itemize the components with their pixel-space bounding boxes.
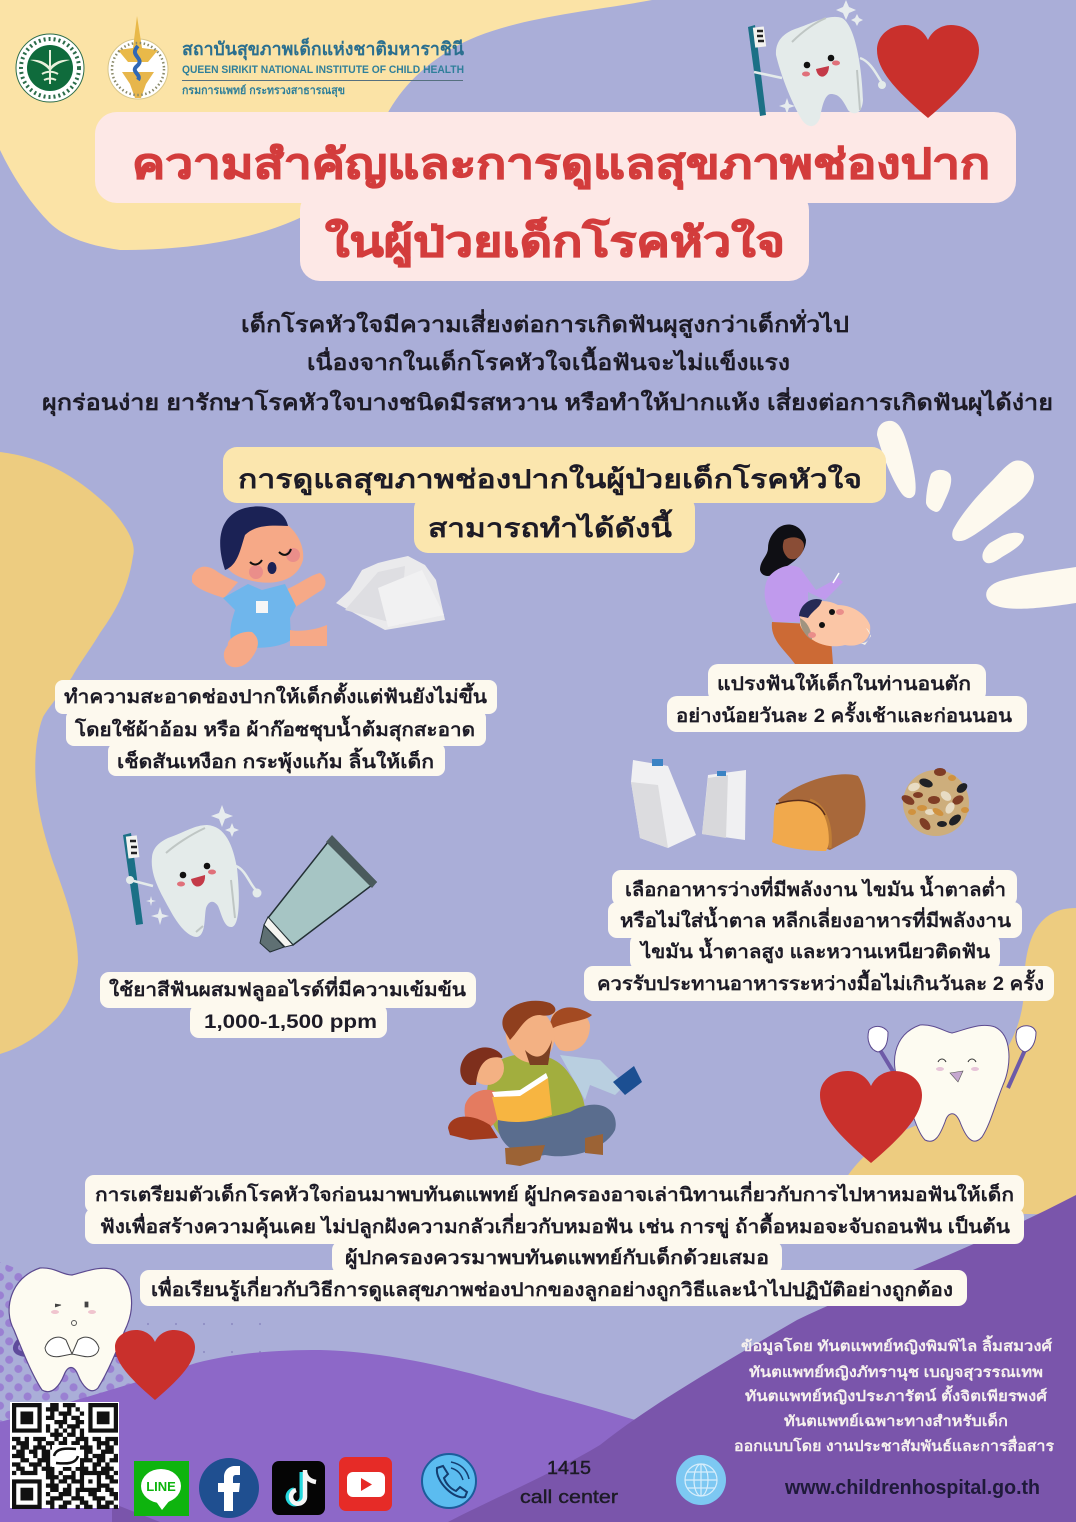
card: preparation text: ฟังเพื่อสร้างความคุ้นเคย ไม่ปลูกฝังความกลัวเกี่ยวกับหมอฟัน เช่น การขู่ ถ้าดื้อหมอจะจับถอนฟัน เป็นต้น xyxy=(100,1212,1010,1239)
subheading plate xyxy=(223,447,886,553)
credits: ทันตแพทย์หญิงภัทรานุช เบญจสุวรรณเทพ xyxy=(749,1363,1043,1381)
illustration: gauze pads xyxy=(336,556,445,630)
wave: light purple xyxy=(0,1350,700,1522)
illustration: toothpaste tube xyxy=(260,835,377,952)
icon: TikTok xyxy=(272,1461,325,1515)
logo: Ministry of Public Health xyxy=(16,34,84,102)
call center label xyxy=(520,1458,618,1507)
icon: phone xyxy=(422,1454,476,1508)
illustration: mother brushing baby's teeth xyxy=(760,525,871,664)
title plate xyxy=(95,112,1016,281)
card: snacks text: ไขมัน น้ำตาลสูง และหวานเหนียวติดฟัน xyxy=(639,937,990,964)
title: ในผู้ป่วยเด็กโรคหัวใจ xyxy=(325,217,785,268)
card: brushing text: แปรงฟันให้เด็กในท่านอนตัก xyxy=(717,671,971,695)
institute name: สถาบันสุขภาพเด็กแห่งชาติมหาราชินี xyxy=(182,37,465,61)
illustration: happy tooth xyxy=(868,1025,1036,1141)
card: clean mouth text: โดยใช้ผ้าอ้อม หรือ ผ้าก๊อซชุบน้ำต้มสุกสะอาด xyxy=(74,715,475,742)
illustration: sleeping baby xyxy=(192,506,327,667)
icon: red heart bottom xyxy=(115,1330,195,1400)
blob: right tan xyxy=(830,908,1076,1215)
shape: small dark purple lower left xyxy=(112,1503,160,1522)
intro paragraph: เด็กโรคหัวใจมีความเสี่ยงต่อการเกิดฟันผุสูงกว่าเด็กทั่วไป xyxy=(241,308,849,339)
card: snacks text: เลือกอาหารว่างที่มีพลังงาน ไขมัน น้ำตาลต่ำ xyxy=(625,875,1006,901)
credits xyxy=(734,1335,1054,1455)
icon: red heart top xyxy=(877,25,979,118)
illustration: milk cartons xyxy=(631,759,746,848)
card: preparation text: เพื่อเรียนรู้เกี่ยวกับวิธีการดูแลสุขภาพช่องปากของลูกอย่างถูกวิธีและนำไปปฏิบัติอย่างถูกต้อง xyxy=(151,1276,953,1302)
icon: red heart middle xyxy=(820,1071,922,1163)
icon: YouTube xyxy=(339,1457,392,1511)
shape: dark purple corner xyxy=(448,1195,1076,1522)
card: clean mouth text: ทำความสะอาดช่องปากให้เด็กตั้งแต่ฟันยังไม่ขึ้น xyxy=(64,682,487,708)
icon: tooth with toothbrush, top xyxy=(748,0,886,126)
illustration: tooth with toothbrush xyxy=(123,805,262,937)
institute name xyxy=(182,37,465,98)
logo: Queen Sirikit institute xyxy=(108,16,168,99)
card: brushing text xyxy=(667,664,1027,732)
blob: left tan xyxy=(0,452,134,1054)
illustration: parent reading with children xyxy=(448,1001,642,1166)
institute name: QUEEN SIRIKIT NATIONAL INSTITUTE OF CHILD HEALTH xyxy=(182,64,464,76)
title xyxy=(132,141,990,268)
card: preparation text: ผู้ปกครองควรมาพบทันตแพทย์กับเด็กด้วยเสมอ xyxy=(345,1245,769,1270)
card: brushing text: อย่างน้อยวันละ 2 ครั้งเช้าและก่อนนอน xyxy=(676,701,1012,727)
card: toothpaste text: 1,000-1,500 ppm xyxy=(204,1012,377,1033)
illustration: bread loaf xyxy=(772,774,866,851)
card: snacks text: ควรรับประทานอาหารระหว่างมื้อไม่เกินวันละ 2 ครั้ง xyxy=(597,969,1044,995)
halftone dots xyxy=(0,1262,150,1440)
icon: LINE: LINE xyxy=(146,1479,176,1494)
institute name: กรมการแพทย์ กระทรวงสาธารณสุข xyxy=(182,84,345,98)
title: ความสำคัญและการดูแลสุขภาพช่องปาก xyxy=(132,141,990,190)
intro paragraph xyxy=(42,308,1053,417)
burst: cream rays xyxy=(877,421,1076,609)
card: preparation text xyxy=(85,1175,1024,1306)
subheading xyxy=(238,463,862,543)
call center label: call center xyxy=(520,1487,618,1507)
intro paragraph: ผุกร่อนง่าย ยารักษาโรคหัวใจบางชนิดมีรสหวาน หรือทำให้ปากแห้ง เสี่ยงต่อการเกิดฟันผุได้ง่าย xyxy=(42,386,1053,417)
icon: globe xyxy=(676,1455,726,1505)
card: toothpaste text: ใช้ยาสีฟันผสมฟลูออไรด์ที่มีความเข้มข้น xyxy=(109,976,466,1002)
QR code xyxy=(10,1402,119,1508)
card: snacks text: หรือไม่ใส่น้ำตาล หลีกเลี่ยงอาหารที่มีพลังงาน xyxy=(620,906,1011,932)
credits: ข้อมูลโดย ทันตแพทย์หญิงพิมพิไล ลิ้มสมวงศ์ xyxy=(741,1335,1053,1355)
intro paragraph: เนื่องจากในเด็กโรคหัวใจเนื้อฟันจะไม่แข็งแรง xyxy=(307,346,790,375)
subheading: การดูแลสุขภาพช่องปากในผู้ป่วยเด็กโรคหัวใจ xyxy=(238,463,862,496)
website: www.childrenhospital.go.th xyxy=(784,1477,1040,1499)
card: toothpaste text xyxy=(100,972,476,1038)
subheading: สามารถทำได้ดังนี้ xyxy=(428,508,673,543)
blob: top-left yellow xyxy=(0,0,652,250)
card: preparation text: การเตรียมตัวเด็กโรคหัวใจก่อนมาพบทันตแพทย์ ผู้ปกครองอาจเล่านิทานเกี่ยวกับการไปหาหมอฟันให้เด็ก xyxy=(95,1181,1014,1207)
call center label: 1415 xyxy=(547,1458,591,1478)
illustration: tooth making heart hands xyxy=(9,1268,132,1392)
fine dot texture xyxy=(135,1308,285,1364)
illustration: mixed beans xyxy=(900,768,969,836)
card: clean mouth text: เช็ดสันเหงือก กระพุ้งแก้ม ลิ้นให้เด็ก xyxy=(117,747,434,774)
credits: ทันตแพทย์หญิงประภารัตน์ ตั้งจิตเพียรพงศ์ xyxy=(745,1385,1048,1405)
icon: Facebook xyxy=(199,1458,259,1518)
icon: LINE xyxy=(134,1461,189,1516)
credits: ทันตแพทย์เฉพาะทางสำหรับเด็ก xyxy=(784,1411,1008,1430)
credits: ออกแบบโดย งานประชาสัมพันธ์และการสื่อสาร xyxy=(734,1435,1054,1455)
card: snacks text xyxy=(584,870,1054,1001)
card: clean mouth text xyxy=(55,680,497,776)
